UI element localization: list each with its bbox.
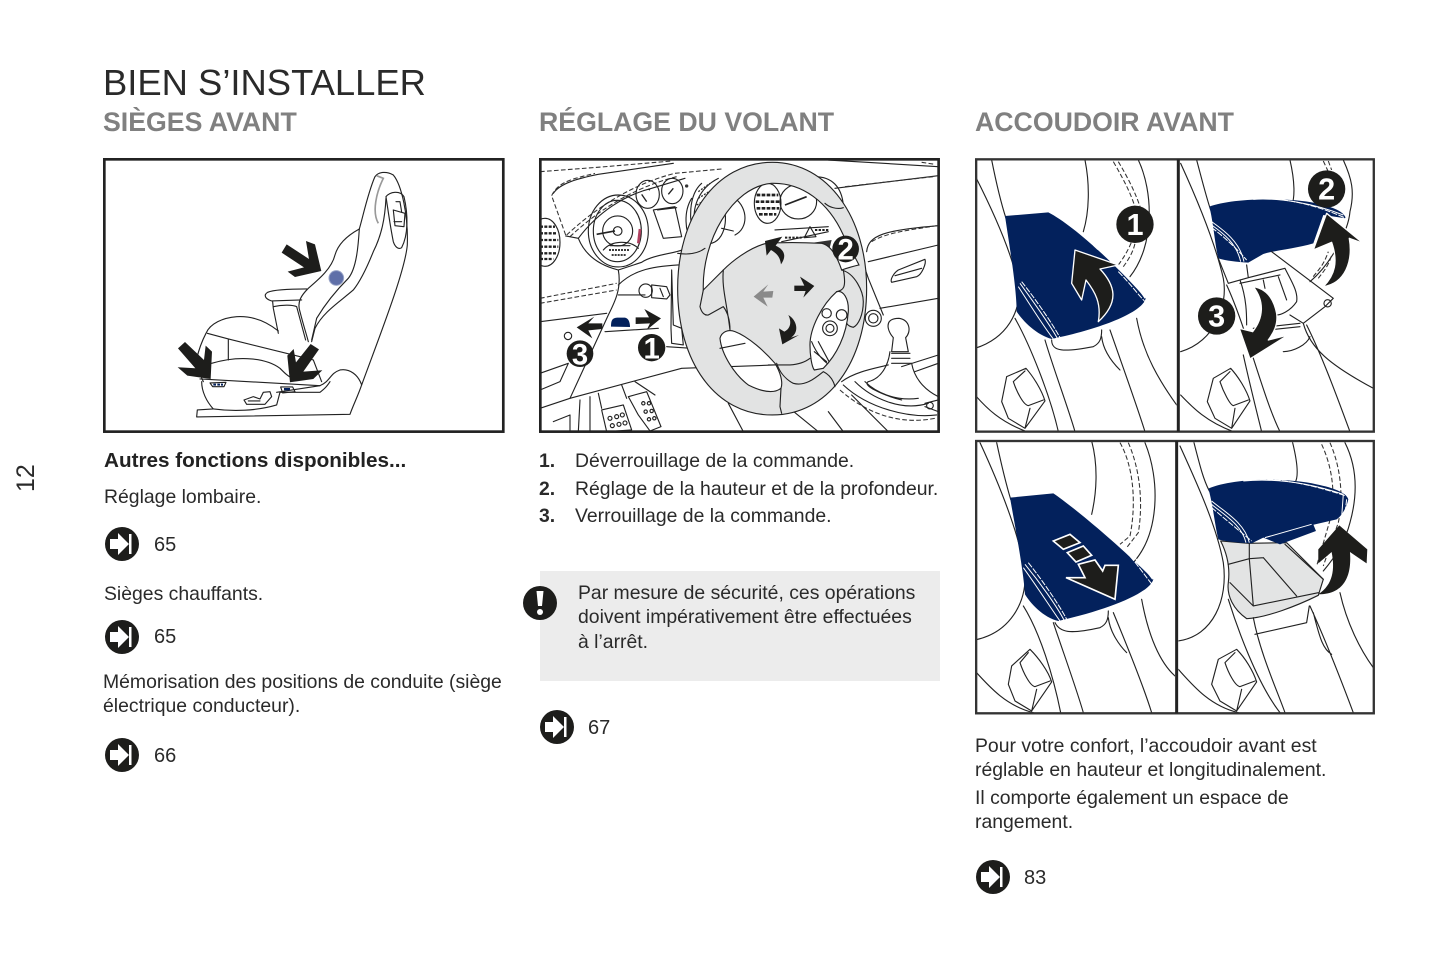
text: rangement: Il comporte également un espace de xyxy=(975,787,1289,809)
arrow: up xyxy=(1313,213,1363,287)
reference: page 67: 67 xyxy=(588,717,610,739)
heading: accoudoir avant: ACCOUDOIR AVANT xyxy=(975,107,1234,137)
text: accoudoir description: Pour votre confort, l’accoudoir avant est xyxy=(975,735,1317,757)
text: rangement xyxy=(975,787,1289,833)
text: mémorisation xyxy=(103,671,502,717)
page number: 12 xyxy=(12,464,40,492)
steering wheel xyxy=(678,162,867,415)
text: rangement: rangement. xyxy=(975,811,1073,833)
callout: safety warning: doivent impérativement être effectuées xyxy=(578,606,912,628)
arrow: rear control xyxy=(287,344,322,382)
callout: safety warning xyxy=(540,571,940,681)
arrow: up-left on hub xyxy=(765,237,784,264)
badge 3: 3 xyxy=(1208,300,1225,334)
reference: page 66: 66 xyxy=(154,745,176,767)
reference: page 65: 65 xyxy=(154,626,176,648)
arrow: down xyxy=(1240,288,1284,358)
icon: warning xyxy=(523,586,557,620)
arrow: right on hub xyxy=(794,277,814,298)
reference: page 83 xyxy=(976,860,1046,894)
arrow: lock xyxy=(577,317,602,338)
badge 3 xyxy=(567,338,593,371)
heading: réglage du volant: RÉGLAGE DU VOLANT xyxy=(539,107,834,137)
column 2: numbered steps xyxy=(539,450,938,527)
lumbar control dot xyxy=(329,271,344,285)
callout: safety warning: Par mesure de sécurité, ces opérations xyxy=(578,582,915,604)
badge 1 xyxy=(1116,206,1154,243)
panel: seat illustration xyxy=(104,159,503,432)
arrow: unlock xyxy=(636,309,661,330)
text: réglage lombaire: Réglage lombaire. xyxy=(104,486,261,508)
reference: page 65 xyxy=(105,620,176,654)
badge 2: 2 xyxy=(837,234,854,267)
dashboard xyxy=(530,160,938,432)
callout: safety warning: à l’arrêt. xyxy=(578,631,648,653)
reference: page 83: 83 xyxy=(1024,867,1046,889)
seat outline xyxy=(197,172,407,417)
step: slide xyxy=(975,441,1175,713)
step: tray xyxy=(1178,443,1373,713)
arrow: lift xyxy=(1072,250,1118,322)
arrow: close tray xyxy=(1318,525,1367,594)
panel: steering wheel illustration xyxy=(530,159,939,432)
badge 1: 1 xyxy=(643,332,660,365)
badge 2 xyxy=(1308,170,1345,208)
text: sièges chauffants: Sièges chauffants. xyxy=(104,583,263,605)
badge 2 xyxy=(832,234,859,267)
title: BIEN S’INSTALLER xyxy=(103,62,426,103)
column 2: numbered steps: Réglage de la hauteur et de la profondeur. xyxy=(575,478,938,500)
column 2: numbered steps: Verrouillage de la commande. xyxy=(575,505,832,527)
reference: page 66 xyxy=(105,738,176,772)
badge 1: 1 xyxy=(1126,208,1144,242)
arrow: lumbar xyxy=(282,241,321,277)
arrow: front control xyxy=(178,342,212,379)
heading: sièges avant: SIÈGES AVANT xyxy=(103,107,297,137)
icon: lever xyxy=(611,318,630,327)
text: mémorisation: électrique conducteur). xyxy=(103,695,300,717)
arrow: left on hub xyxy=(754,284,773,307)
column 2: numbered steps: Déverrouillage de la commande. xyxy=(575,450,854,472)
reference: page 65 xyxy=(105,527,176,561)
column 2: numbered steps: 1. xyxy=(539,450,555,472)
reference: page 65: 65 xyxy=(154,534,176,556)
column 2: numbered steps: 3. xyxy=(539,505,555,527)
badge 2: 2 xyxy=(1318,173,1335,207)
text: accoudoir description xyxy=(975,735,1326,781)
step 2-3: open xyxy=(1181,160,1373,432)
panel: armrest steps slide and tray xyxy=(975,441,1374,713)
badge 3 xyxy=(1198,297,1235,335)
reference: page 67 xyxy=(540,710,610,744)
arrow: down on hub xyxy=(779,315,799,344)
text: mémorisation: Mémorisation des positions de conduite (siège xyxy=(103,671,502,693)
illustrations xyxy=(103,158,1375,714)
text: accoudoir description: réglable en hauteur et longitudinalement. xyxy=(975,759,1326,781)
step 1: unlock xyxy=(975,160,1177,432)
column 1: subheading: Autres fonctions disponibles... xyxy=(104,449,406,472)
column 2: numbered steps: 2. xyxy=(539,478,555,500)
panel: armrest steps 1-3 xyxy=(975,159,1374,432)
icon: slide arrow xyxy=(1053,534,1118,599)
badge 1 xyxy=(638,332,665,365)
badge 3: 3 xyxy=(572,338,588,371)
